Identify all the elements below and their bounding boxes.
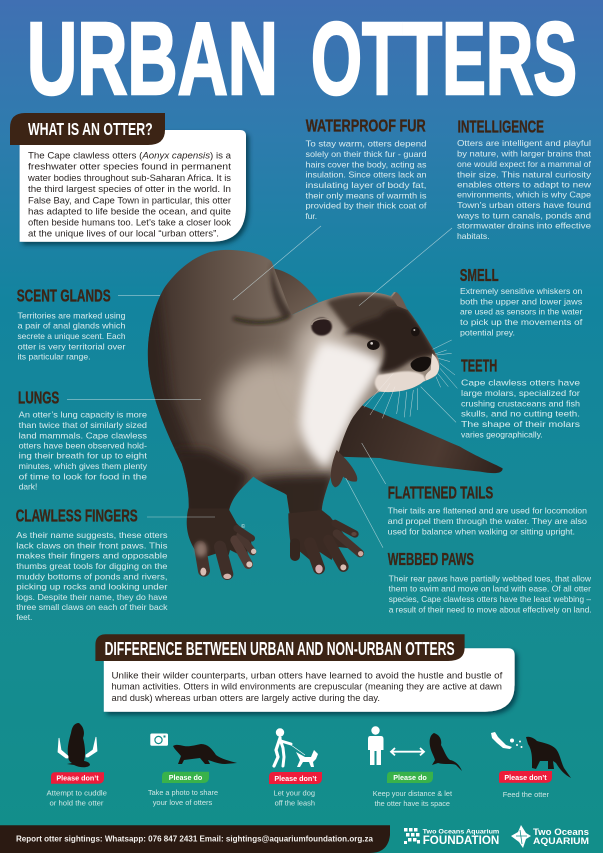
body text	[19, 410, 148, 491]
body text: thumbs great tools for digging on the	[16, 561, 168, 571]
body text: one would expect for a mammal of	[457, 159, 592, 169]
ears, eyes and nose	[311, 292, 431, 372]
body text: secrete a unique scent. Each	[18, 331, 126, 341]
intro text: often beside humans too. Let’s take a closer look	[28, 218, 232, 228]
caption: or hold the otter	[50, 798, 104, 807]
body text: skulls, and no cutting teeth.	[461, 409, 580, 419]
heading: FLATTENED TAILS	[388, 482, 493, 502]
crown of the head	[327, 295, 438, 360]
block: teeth	[461, 355, 580, 439]
tip: do not feed	[491, 732, 571, 799]
intro text	[27, 151, 232, 239]
body text: ing their breath for up to eight	[19, 451, 148, 461]
tail	[337, 402, 503, 473]
body text: minutes, which gives them plenty	[19, 461, 148, 471]
body text: a pair of anal glands which	[18, 321, 126, 331]
badge: Please don’t	[274, 774, 317, 783]
body text: Town’s urban otters have found	[457, 200, 591, 210]
left front paw	[187, 508, 256, 579]
heading: WEBBED PAWS	[388, 549, 474, 569]
body text	[306, 139, 427, 221]
icon: walker and dog	[274, 728, 318, 767]
caption	[274, 789, 315, 807]
title	[27, 1, 577, 116]
leader lines	[67, 226, 456, 548]
body and head fur	[148, 250, 440, 514]
body text: As their name suggests, these otters	[16, 530, 167, 540]
body text: otter is very territorial over	[18, 341, 126, 351]
panel body	[20, 130, 246, 242]
panel header	[95, 634, 465, 661]
icon: camera and otter	[150, 734, 237, 764]
body text: Their tails are flattened and are used for locomotion	[388, 506, 587, 516]
icon: otter held by hands	[58, 723, 97, 767]
body text: stormwater drains into effective	[457, 221, 591, 231]
intro text: has adapted to life beside the ocean, and quite	[28, 207, 231, 217]
heading: INTELLIGENCE	[458, 116, 544, 136]
heading: SCENT GLANDS	[17, 286, 111, 306]
body text	[460, 286, 583, 337]
body text: environments, which is why Cape	[457, 190, 591, 200]
body text: potential prey.	[460, 327, 515, 337]
body text: picking up rocks and looking under	[16, 582, 168, 592]
intro text: water bodies throughout sub-Saharan Africa. It is	[27, 173, 232, 183]
body text	[461, 378, 580, 439]
body text: insulation. Since otters lack an	[306, 170, 427, 180]
heading: CLAWLESS FINGERS	[16, 506, 138, 526]
title: URBAN	[27, 1, 278, 116]
body text: ways to turn canals, ponds and	[456, 210, 591, 220]
body text: them to swim and move on land with ease. Of all otter	[389, 584, 591, 594]
body text: An otter’s lung capacity is more	[19, 410, 147, 420]
body text: Cape clawless otters have	[461, 378, 580, 388]
body text: and dusk) whereas urban otters are largely active during the day.	[112, 693, 380, 703]
body text: and propel them through the water. They are also	[388, 516, 587, 526]
tip: keep your distance	[368, 726, 462, 808]
body text: used for balance when walking or sitting upright.	[388, 526, 575, 536]
badge: Please don’t	[504, 773, 547, 782]
body text: of time to look for food in the	[19, 471, 147, 481]
body text: three small claws on each of their back	[16, 602, 168, 612]
copyright mark: ©	[241, 523, 246, 530]
caption: Keep your distance & let	[373, 789, 453, 798]
tip: take a photo	[148, 734, 237, 807]
body text: Unlike their wilder counterparts, urban otters have learned to avoid the hustle and bustle of	[112, 670, 503, 680]
body text: its particular range.	[18, 352, 90, 362]
body text: Otters are intelligent and playful	[457, 138, 591, 148]
body text: are used as sensors in the water	[460, 307, 583, 317]
badge: Please do	[393, 773, 427, 782]
footer bar: Report otter sightings: Whatsapp: 076 847 2431 Email: sightings@aquariumfoundation.org.za	[16, 835, 373, 844]
body text: lack claws on their front paws. This	[16, 540, 167, 550]
front hand	[331, 450, 357, 487]
nose tip fur	[425, 353, 439, 381]
caption	[148, 788, 218, 807]
block: intelligence	[456, 116, 592, 241]
icon: person, arrow and otter	[368, 726, 462, 771]
intro text: the third largest species of otter in the world. In	[28, 184, 231, 194]
body text	[112, 670, 503, 703]
body text: a result of their need to move about effectively on land.	[389, 604, 592, 614]
hip	[270, 268, 318, 315]
logo: Two Oceans Aquarium Foundation: FOUNDATION	[423, 833, 499, 847]
body text: otters have been observed hold-	[19, 440, 147, 450]
heading: WATERPROOF FUR	[306, 116, 426, 136]
body text: land mammals. Cape clawless	[19, 430, 147, 440]
caption: Let your dog	[274, 789, 315, 798]
body text	[18, 310, 126, 362]
body text: enables otters to adapt to new	[457, 179, 592, 189]
intro text: at the unique lives of our local “urban otters”.	[28, 229, 219, 239]
intro text: freshwater otter species found in permanent	[28, 162, 232, 172]
heading: LUNGS	[18, 387, 59, 407]
caption: the otter have its space	[375, 799, 450, 808]
body text	[389, 574, 592, 614]
logo: Two Oceans Aquarium Foundation	[404, 828, 499, 847]
body text: muddy bottoms of ponds and rivers,	[16, 571, 167, 581]
body text: Territories are marked using	[18, 310, 126, 320]
panel body	[104, 648, 515, 712]
caption	[373, 789, 453, 808]
body text	[388, 506, 587, 536]
body text: The shape of their molars	[461, 419, 580, 429]
body text: fur.	[306, 211, 317, 221]
body text: to pick up the movements of	[460, 317, 583, 327]
tip: dog on leash	[269, 728, 322, 807]
block: lungs	[18, 387, 148, 491]
caption: your love of otters	[153, 798, 212, 807]
intro text: The Cape clawless otters ( Aonyx capensis ) is a	[28, 151, 231, 161]
logo: Two Oceans Aquarium	[511, 825, 589, 848]
badge: Please don’t	[56, 774, 99, 783]
body text: Extremely sensitive whiskers on	[460, 286, 583, 296]
block: smell	[460, 265, 583, 337]
caption	[46, 789, 107, 807]
footer bar	[0, 825, 390, 853]
body text: both the upper and lower jaws	[460, 296, 582, 306]
body text	[16, 530, 168, 622]
body text: Their rear paws have partially webbed toes, that allow	[389, 574, 592, 584]
body text: varies geographically.	[461, 429, 543, 439]
panel: what is an otter	[10, 113, 246, 242]
caption: Take a photo to share	[148, 788, 218, 797]
body text: To stay warm, otters depend	[306, 139, 427, 149]
heading: WHAT IS AN OTTER?	[28, 119, 153, 139]
body text: makes their fingers and opposable	[16, 551, 168, 561]
block: waterproof fur	[306, 116, 427, 221]
body text: dark!	[19, 481, 37, 491]
body text: provided by their thick coat of	[306, 201, 427, 211]
block: webbed paws	[388, 549, 592, 614]
whiskers	[364, 340, 457, 418]
body text: logs. Despite their name, they do have	[16, 592, 168, 602]
body text: solely on their thick fur - guard	[306, 149, 427, 159]
panel header	[10, 113, 165, 145]
tip: do not cuddle	[46, 723, 107, 807]
logo: Two Oceans Aquarium: AQUARIUM	[533, 836, 589, 847]
caption: Attempt to cuddle	[46, 789, 107, 798]
caption: Feed the otter	[503, 790, 549, 799]
body text: human activities. Otters in wild environments are crepuscular (meaning they are active at dawn	[112, 682, 502, 692]
block: scent glands	[17, 286, 126, 362]
otter illustration	[133, 243, 503, 579]
logo: Two Oceans Aquarium Foundation: Two Oceans Aquarium	[423, 828, 499, 835]
body text: feet.	[16, 612, 32, 622]
badge: Please do	[169, 773, 203, 782]
right rear paw	[288, 510, 363, 573]
body text: their only means of warmth is	[306, 190, 426, 200]
icon: hand dropping food and otter	[491, 732, 571, 778]
body text: large molars, specialized for	[461, 388, 580, 398]
intro text: False Bay, and Cape Town in particular, this otter	[28, 195, 231, 205]
heading: TEETH	[461, 355, 497, 375]
block: flattened tails	[388, 482, 587, 536]
block: clawless fingers	[16, 506, 168, 622]
body text: by nature, with larger brains that	[457, 149, 592, 159]
body text: crushing crustaceans and fish	[461, 398, 580, 408]
body text: than twice that of similarly sized	[19, 420, 147, 430]
body text: habitats.	[457, 231, 490, 241]
body text	[456, 138, 592, 241]
body text: species, Cape clawless otters have the least webbing –	[389, 594, 591, 604]
body text: their size. This natural curiosity	[457, 169, 592, 179]
body text: hairs cover the body, acting as	[306, 159, 426, 169]
panel: difference between urban and non-urban otters	[95, 634, 515, 712]
body text: insulating layer of body fat,	[306, 180, 426, 190]
dark eye mask	[343, 308, 433, 373]
chest fur	[300, 342, 382, 468]
heading: SMELL	[460, 265, 499, 285]
logo: Two Oceans Aquarium: Two Oceans	[533, 827, 589, 837]
muzzle	[375, 371, 427, 393]
caption: off the leash	[275, 798, 315, 807]
